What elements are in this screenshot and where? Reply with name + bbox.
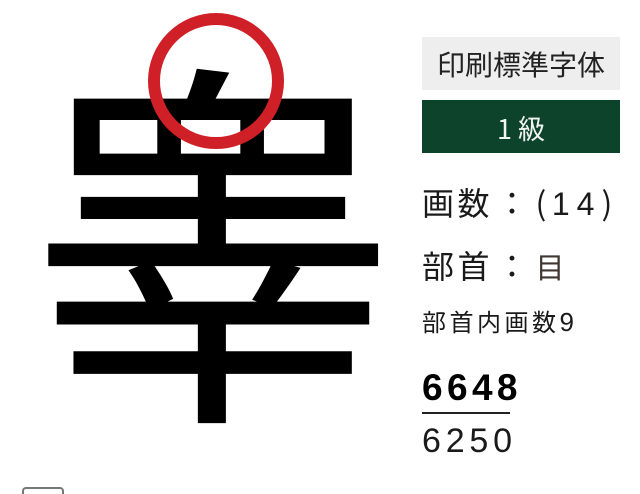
code number regular: 6250: [422, 422, 517, 460]
icon: cropped button: [22, 487, 64, 494]
label: printed standard form: [422, 37, 620, 90]
stroke count: 画数：(14): [422, 179, 616, 225]
code divider: [422, 412, 510, 414]
kanji level badge: [422, 100, 620, 153]
kanji level badge: 1 級: [497, 108, 545, 147]
strokes within radical: 部首内画数9: [422, 303, 577, 338]
radical: 部首：目: [422, 242, 568, 288]
red highlight circle: [148, 13, 284, 149]
code number bold: 6648: [422, 367, 522, 408]
label: printed standard form: 印刷標準字体: [437, 44, 605, 84]
